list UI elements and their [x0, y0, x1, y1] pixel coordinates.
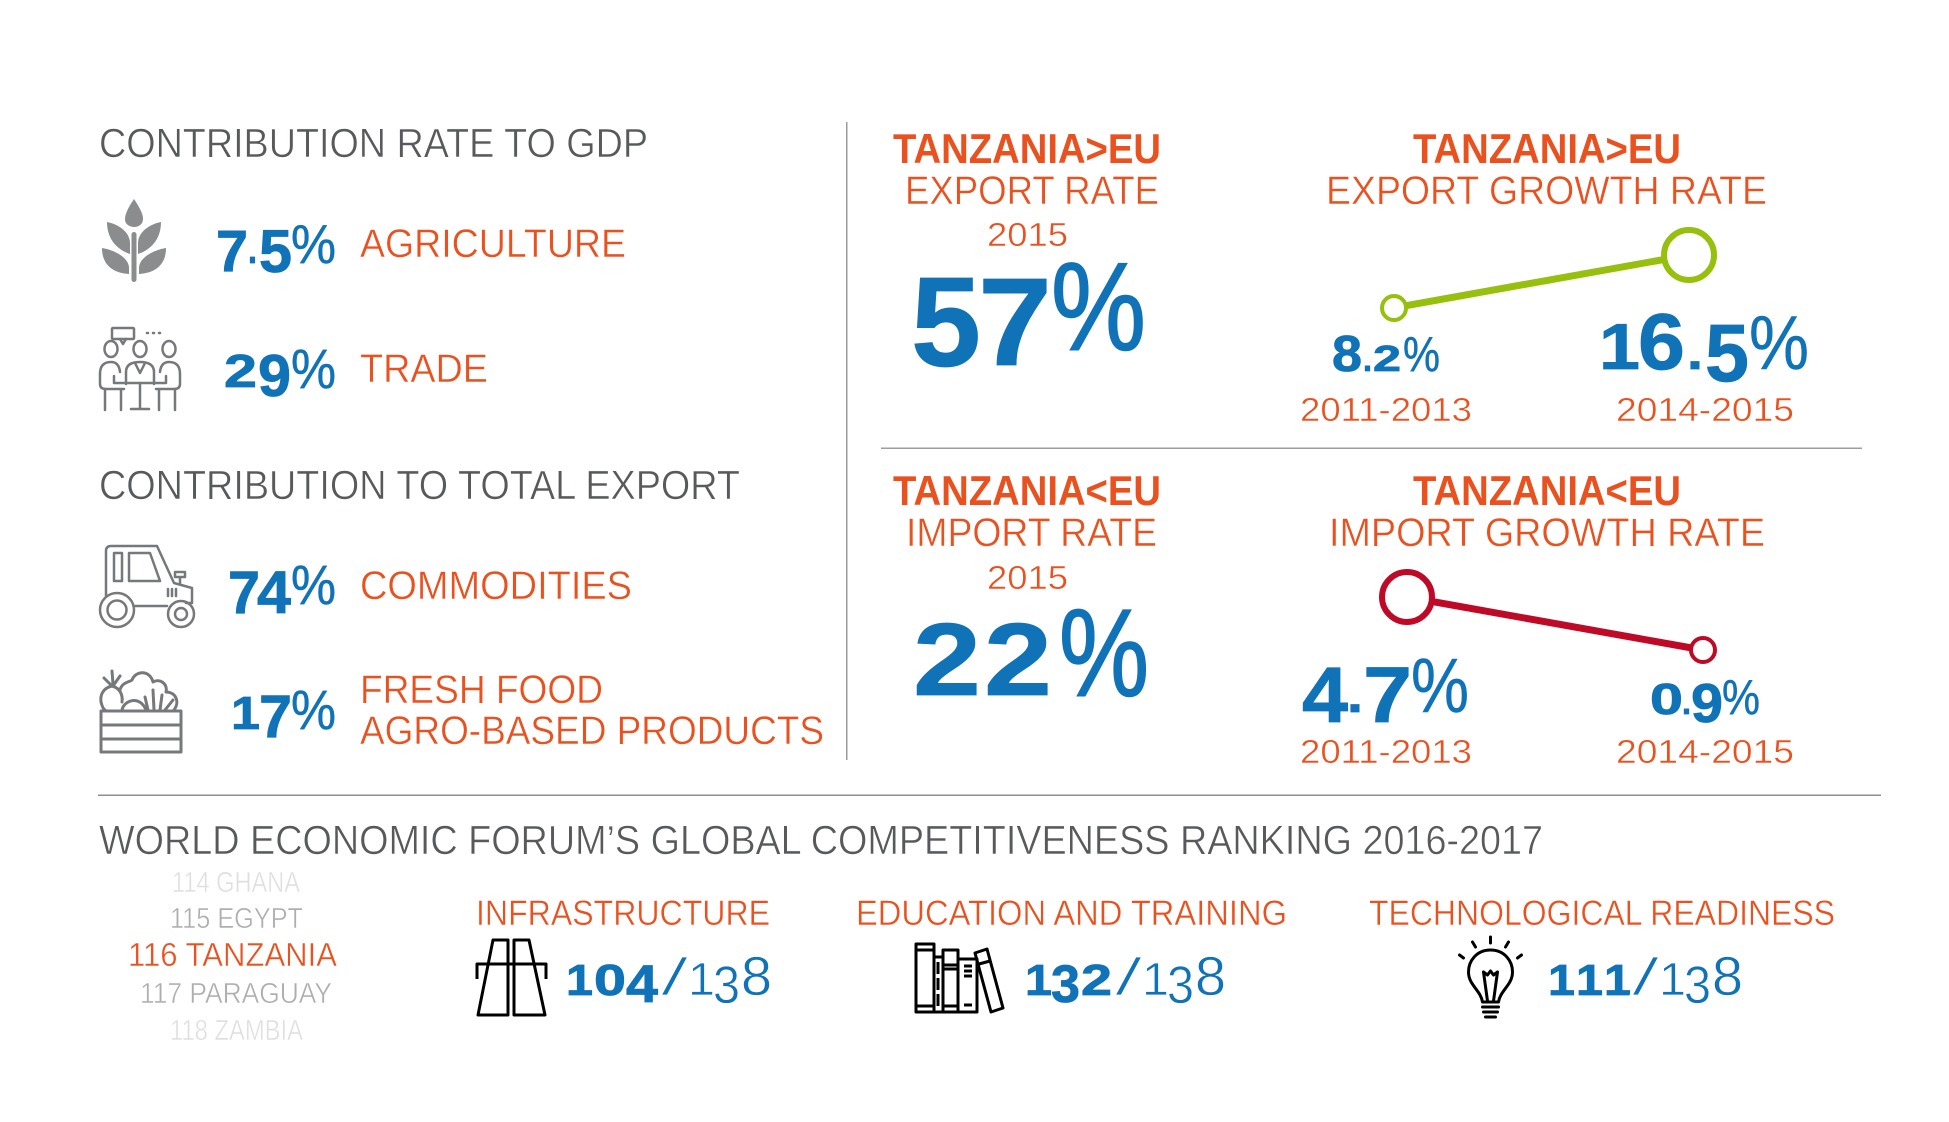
label: education and training: EDUCATION AND TRAINING — [856, 894, 1287, 933]
ranking list: 118 ZAMBIA — [170, 1015, 304, 1047]
value: 16.5 percent: 1 — [1599, 310, 1640, 383]
label: fresh food and agro-based products: FRESH FOOD — [360, 668, 603, 712]
value: 4.7 percent — [1302, 643, 1469, 739]
icon: vegetable crate — [101, 671, 181, 752]
score: technological readiness 111 of 138: 3 — [1684, 956, 1711, 1015]
value: 7.5 percent — [216, 213, 336, 285]
chart: export growth line — [1382, 230, 1714, 320]
label: fresh food and agro-based products: AGRO-BASED PRODUCTS — [360, 709, 824, 753]
value: 17 percent: 1 — [231, 687, 260, 739]
value: 4.7 percent: 4 — [1302, 650, 1348, 739]
score: infrastructure 104 of 138: 1 — [566, 956, 593, 1005]
value: 57 percent — [911, 238, 1146, 393]
label: year 2015: 2015 — [987, 559, 1068, 596]
value: 29 percent: 2 — [224, 345, 257, 397]
value: 8.2 percent: % — [1403, 328, 1440, 382]
value: 0.9 percent: 0 — [1650, 675, 1683, 724]
heading: Tanzania to EU: TANZANIA>EU — [1413, 125, 1681, 172]
ranking list — [128, 867, 337, 1047]
heading: EU to Tanzania: TANZANIA<EU — [1413, 467, 1681, 514]
label: import rate: IMPORT RATE — [906, 511, 1157, 555]
value: 29 percent: % — [291, 337, 336, 400]
label: trade: TRADE — [360, 347, 488, 391]
value: 7.5 percent: 5 — [259, 218, 292, 285]
value: 74 percent: 7 — [228, 559, 260, 626]
value: 16.5 percent: . — [1687, 324, 1703, 380]
value: 4.7 percent: % — [1411, 643, 1469, 729]
value: 4.7 percent: 7 — [1363, 650, 1412, 739]
value: 16.5 percent: % — [1749, 301, 1809, 386]
value: 22 percent: 2 — [913, 602, 981, 717]
panel: import rate — [893, 467, 1161, 723]
value: 17 percent: 7 — [259, 683, 292, 750]
heading: contribution to total export: CONTRIBUTION TO TOTAL EXPORT — [99, 462, 740, 508]
value: 0.9 percent: . — [1682, 684, 1691, 722]
value: 8.2 percent: 2 — [1373, 338, 1401, 379]
heading: contribution rate to GDP: CONTRIBUTION RATE TO GDP — [99, 120, 648, 166]
heading: Tanzania to EU: TANZANIA>EU — [893, 125, 1161, 172]
label: fresh food and agro-based products — [360, 668, 824, 753]
value: 7.5 percent: % — [291, 213, 336, 275]
label: period 2011-2013: 2011-2013 — [1300, 391, 1472, 428]
label: infrastructure: INFRASTRUCTURE — [476, 894, 770, 933]
label: export growth rate: EXPORT GROWTH RATE — [1326, 169, 1767, 213]
value: 29 percent: 9 — [258, 343, 291, 409]
score: infrastructure 104 of 138: 3 — [713, 956, 740, 1015]
value: 74 percent: 4 — [257, 559, 292, 626]
label: period 2011-2013: 2011-2013 — [1300, 733, 1472, 770]
panel: contribution to total export — [99, 462, 824, 753]
score: infrastructure 104 of 138: 8 — [741, 945, 772, 1007]
value: 8.2 percent — [1332, 325, 1440, 382]
value: 8.2 percent: . — [1363, 341, 1372, 379]
icon: light bulb — [1460, 937, 1522, 1017]
value: 17 percent: % — [291, 678, 336, 741]
panel: export rate — [893, 125, 1161, 393]
value: 4.7 percent: . — [1347, 667, 1363, 723]
score: education 132 of 138 — [1025, 945, 1226, 1015]
label: agriculture: AGRICULTURE — [360, 222, 626, 266]
label: technological readiness: TECHNOLOGICAL READINESS — [1369, 894, 1835, 933]
score: education 132 of 138: 2 — [1081, 956, 1112, 1005]
score: technological readiness 111 of 138: 8 — [1712, 945, 1743, 1007]
score: infrastructure 104 of 138 — [566, 945, 772, 1015]
score: education 132 of 138: / — [1114, 948, 1144, 1007]
ranking list: 116 TANZANIA — [128, 936, 337, 973]
score: technological readiness 111 of 138: 1 — [1548, 956, 1575, 1005]
score: education 132 of 138: 1 — [1025, 956, 1052, 1005]
value: 29 percent — [224, 337, 336, 409]
score: technological readiness 111 of 138: 1 — [1604, 956, 1631, 1005]
panel: import growth rate — [1300, 467, 1794, 770]
value: 16.5 percent: 5 — [1705, 308, 1749, 399]
score: infrastructure 104 of 138: 4 — [626, 955, 659, 1014]
value: 74 percent: % — [291, 553, 336, 616]
label: export rate: EXPORT RATE — [905, 169, 1159, 213]
score: technological readiness 111 of 138: / — [1631, 948, 1661, 1007]
value: 0.9 percent: 9 — [1691, 672, 1723, 734]
value: 7.5 percent: . — [248, 228, 257, 272]
score: education 132 of 138: 3 — [1167, 956, 1194, 1015]
panel: export growth rate — [1300, 125, 1809, 428]
heading: global competitiveness ranking: WORLD ECONOMIC FORUM’S GLOBAL COMPETITIVENESS RANKING 2016-2017 — [99, 817, 1543, 863]
heading: EU to Tanzania: TANZANIA<EU — [893, 467, 1161, 514]
icon: wheat — [102, 199, 166, 282]
value: 22 percent: % — [1059, 585, 1149, 723]
score: infrastructure 104 of 138: / — [660, 948, 690, 1007]
ranking list: 115 EGYPT — [170, 903, 303, 935]
score: technological readiness 111 of 138: 1 — [1659, 953, 1686, 1005]
score: education 132 of 138: 3 — [1051, 955, 1080, 1014]
value: 16.5 percent — [1599, 297, 1809, 399]
value: 57 percent: 7 — [978, 253, 1052, 392]
value: 22 percent — [913, 585, 1149, 723]
icon: meeting team — [100, 328, 180, 410]
score: infrastructure 104 of 138: 0 — [594, 956, 626, 1005]
score: technological readiness 111 of 138 — [1548, 945, 1743, 1015]
label: period 2014-2015: 2014-2015 — [1616, 733, 1794, 770]
label: period 2014-2015: 2014-2015 — [1616, 391, 1794, 428]
score: education 132 of 138: 1 — [1142, 953, 1169, 1005]
score: technological readiness 111 of 138: 1 — [1576, 956, 1603, 1005]
ranking list: 117 PARAGUAY — [140, 978, 332, 1010]
label: commodities: COMMODITIES — [360, 564, 632, 608]
value: 0.9 percent: % — [1722, 671, 1760, 725]
value: 16.5 percent: 6 — [1638, 297, 1685, 386]
label: year 2015: 2015 — [987, 216, 1068, 253]
icon: tractor — [100, 546, 194, 627]
value: 57 percent: 5 — [911, 251, 981, 393]
panel: contribution rate to GDP — [99, 120, 648, 410]
icon: books — [916, 944, 1003, 1012]
value: 0.9 percent — [1650, 671, 1760, 734]
label: import growth rate: IMPORT GROWTH RATE — [1329, 511, 1765, 555]
value: 8.2 percent: 8 — [1332, 325, 1362, 382]
value: 17 percent — [231, 678, 336, 750]
chart: import growth line — [1382, 572, 1715, 662]
ranking list: 114 GHANA — [172, 867, 301, 899]
icon: highway — [477, 940, 546, 1015]
value: 22 percent: 2 — [984, 602, 1052, 717]
panel: global competitiveness ranking — [99, 817, 1835, 1047]
score: infrastructure 104 of 138: 1 — [688, 953, 715, 1005]
value: 74 percent — [228, 553, 336, 626]
value: 7.5 percent: 7 — [216, 219, 248, 284]
value: 57 percent: % — [1051, 238, 1146, 377]
score: education 132 of 138: 8 — [1195, 945, 1226, 1007]
